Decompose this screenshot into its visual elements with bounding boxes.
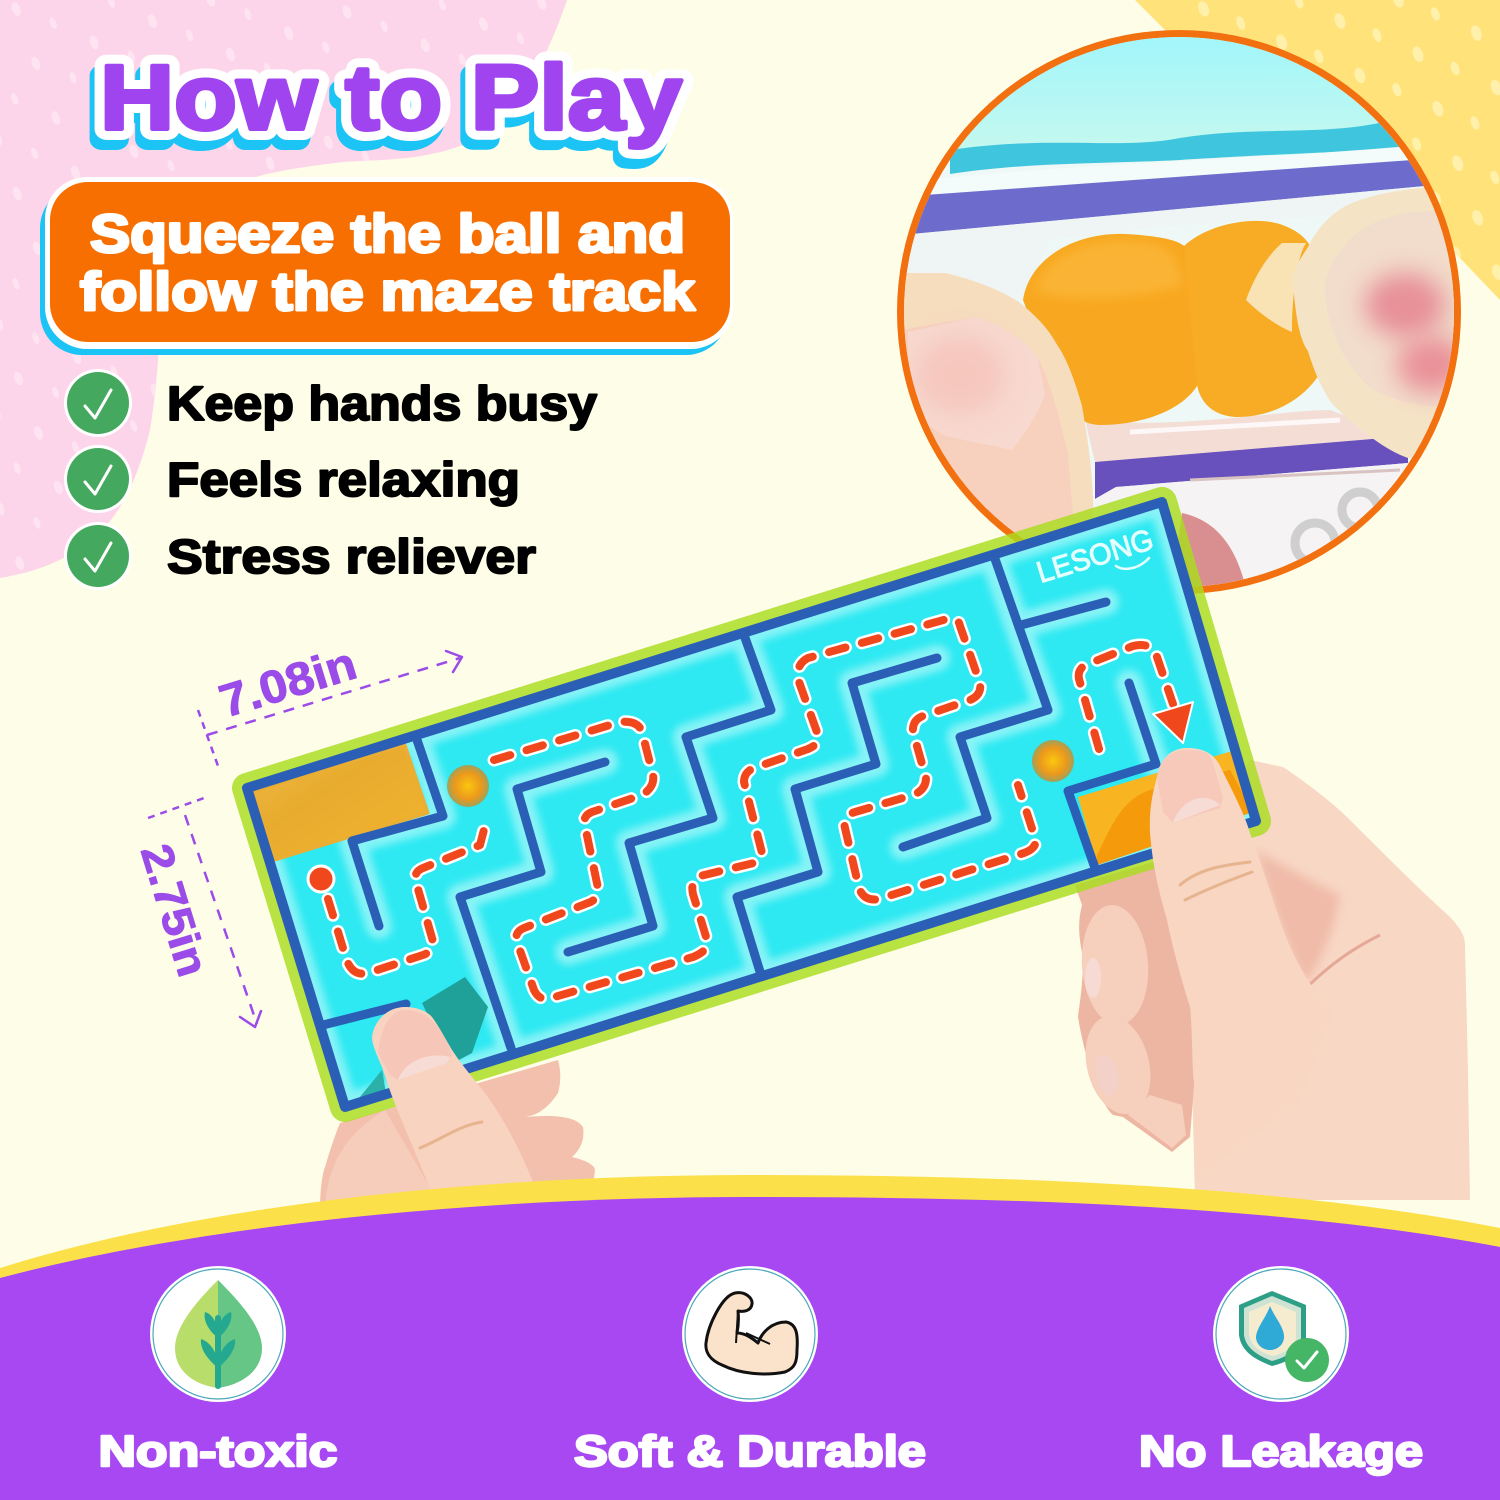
item: stress reliever: Stress reliever xyxy=(167,531,536,584)
left thumb xyxy=(372,1007,538,1205)
left hand behind board xyxy=(320,1060,595,1215)
feature: soft and durable: Soft & Durable xyxy=(574,1427,926,1476)
feature: soft and durable xyxy=(574,1266,926,1476)
orange instruction banner xyxy=(40,177,733,355)
purple footer panel xyxy=(0,1197,1500,1500)
feature: non-toxic xyxy=(98,1266,338,1476)
item: feels relaxing xyxy=(64,445,520,513)
back of hand xyxy=(1180,760,1470,1200)
pink background blob xyxy=(0,0,567,578)
title: How to Play xyxy=(100,47,682,149)
dashed route orange xyxy=(328,618,1173,999)
orange instruction banner: follow the maze track xyxy=(80,262,696,322)
title: How to Play xyxy=(95,57,677,159)
route end arrow xyxy=(1153,702,1193,743)
thumb knuckle crease xyxy=(1180,862,1252,900)
orange instruction banner: Squeeze the ball and xyxy=(90,204,685,264)
item: keep hands busy xyxy=(64,369,597,437)
thumb nail xyxy=(1157,750,1223,823)
feature: no leakage: No Leakage xyxy=(1139,1427,1423,1476)
ball left xyxy=(447,765,489,807)
checklist xyxy=(64,369,597,590)
item: keep hands busy: Keep hands busy xyxy=(167,378,597,431)
left finger xyxy=(904,273,1094,540)
dimension: height 2.75in xyxy=(131,798,261,1027)
right hand behind board xyxy=(1075,760,1470,1200)
yellow background blob xyxy=(1135,0,1500,300)
dimension: width 7.08in xyxy=(198,637,462,766)
title: How to Play xyxy=(100,47,682,149)
icon: flexed arm xyxy=(706,1293,797,1374)
thumb knuckle crease xyxy=(420,1122,482,1148)
ball right xyxy=(1032,740,1074,782)
yellow start block xyxy=(253,745,428,860)
maze walls xyxy=(323,556,1156,1048)
thumb web shadow xyxy=(1256,850,1340,985)
icon: shield with water drop xyxy=(1239,1291,1329,1382)
right finger xyxy=(1293,188,1454,458)
item: stress reliever xyxy=(64,522,536,590)
maze wall glow xyxy=(247,502,1256,1107)
item: feels relaxing: Feels relaxing xyxy=(167,454,520,507)
dimension: height 2.75in: 2.75in xyxy=(131,839,217,982)
feature: non-toxic: Non-toxic xyxy=(98,1427,338,1476)
icon: leaf xyxy=(175,1280,262,1388)
dimension: width 7.08in: 7.08in xyxy=(213,637,362,727)
maze board xyxy=(247,502,1256,1107)
brand logo: LESONG xyxy=(1033,523,1157,590)
teal corner block xyxy=(355,977,488,1103)
blue frame xyxy=(247,502,1256,1107)
yellow wave band xyxy=(0,1175,1500,1300)
thumb nail xyxy=(378,1010,452,1080)
route start dot xyxy=(308,866,334,892)
yellow squeezed ball xyxy=(1023,221,1327,425)
yellow end block xyxy=(1078,750,1253,865)
right thumb xyxy=(1150,748,1333,1180)
feature: no leakage xyxy=(1139,1266,1423,1476)
maze floor xyxy=(247,502,1256,1107)
dashed route white outline xyxy=(328,618,1173,999)
green board edge xyxy=(247,502,1256,1107)
circular close-up photo: squeezing ball xyxy=(890,30,1470,600)
fingers xyxy=(1075,860,1200,1152)
